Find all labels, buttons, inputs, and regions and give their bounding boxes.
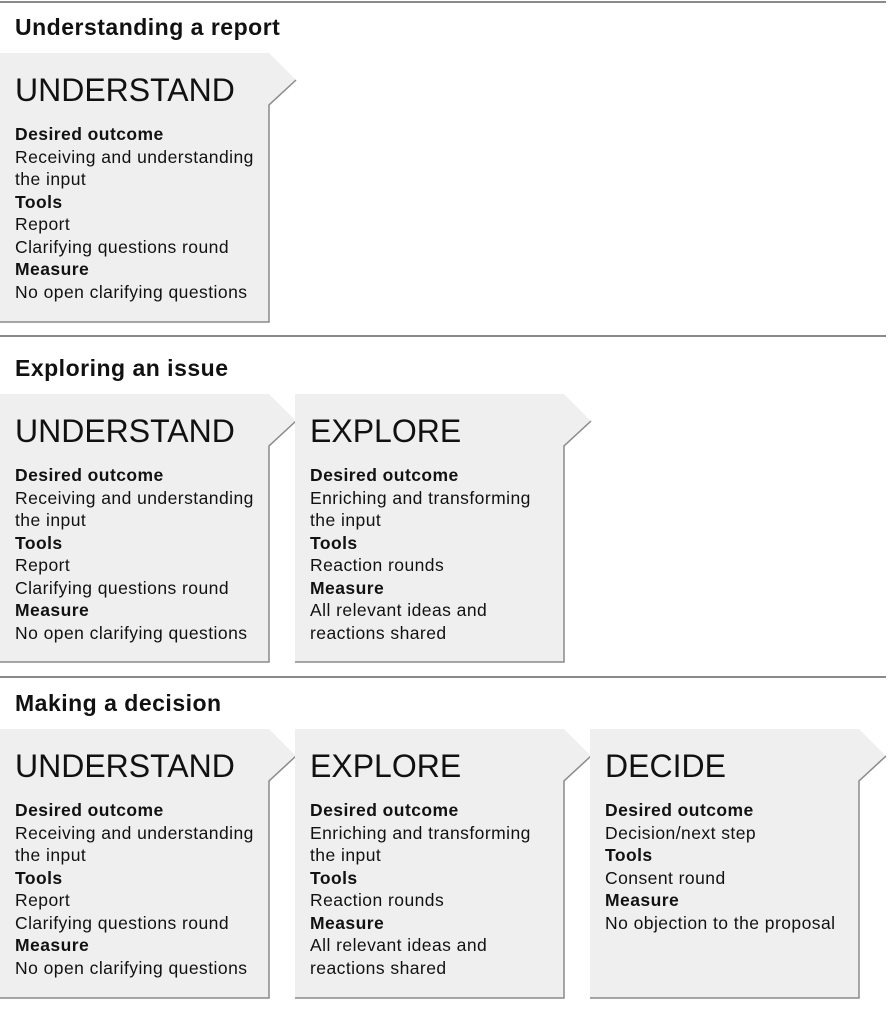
card: understand 3: Tools [15, 868, 63, 888]
card: understand 1: No open clarifying questions [15, 282, 247, 302]
card: explore 3: All relevant ideas and [310, 935, 487, 955]
card: explore 3: Desired outcome [310, 800, 459, 820]
card: explore 3 [295, 729, 590, 999]
card: understand 3: Clarifying questions round [15, 912, 229, 932]
title: understanding a report: Understanding a report [15, 14, 280, 40]
card: decide 3: No objection to the proposal [605, 912, 836, 932]
card: understand 3: the input [15, 845, 86, 865]
card: understand 2: Measure [15, 600, 89, 620]
card: understand 3: Desired outcome [15, 800, 164, 820]
card: understand 2: UNDERSTAND [15, 413, 235, 449]
card: understand 2: the input [15, 510, 86, 530]
card: understand 3: Report [15, 890, 70, 910]
card: explore 3: Tools [310, 868, 358, 888]
card: explore 2: EXPLORE [310, 413, 461, 449]
card: understand 2: No open clarifying questions [15, 622, 247, 642]
card: decide 3: DECIDE [605, 748, 726, 784]
card: understand 1: Desired outcome [15, 124, 164, 144]
card: understand 1 [0, 53, 296, 323]
card: understand 2: Receiving and understanding [15, 488, 254, 508]
card: explore 2: the input [310, 510, 381, 530]
card: decide 3: Consent round [605, 868, 726, 888]
card: understand 1: the input [15, 169, 86, 189]
title: exploring an issue: Exploring an issue [15, 355, 228, 381]
title: making a decision: Making a decision [15, 690, 222, 716]
card: explore 3: EXPLORE [310, 748, 461, 784]
card: explore 2 [295, 394, 592, 663]
card: understand 3: Receiving and understanding [15, 822, 254, 842]
card: understand 2: Desired outcome [15, 465, 164, 485]
card: explore 2: Tools [310, 532, 358, 552]
card: understand 1: Report [15, 214, 70, 234]
card: explore 2: Reaction rounds [310, 555, 444, 575]
card: understand 3: Measure [15, 935, 89, 955]
card: explore 2: Enriching and transforming [310, 488, 531, 508]
card: understand 1: Tools [15, 192, 63, 212]
card: explore 3: reactions shared [310, 958, 447, 978]
card: understand 2: Report [15, 555, 70, 575]
card: explore 3: Enriching and transforming [310, 822, 531, 842]
card: decide 3: Tools [605, 845, 653, 865]
card: decide 3: Decision/next step [605, 822, 756, 842]
card: understand 2: Tools [15, 532, 63, 552]
card: understand 1: UNDERSTAND [15, 72, 235, 108]
card: understand 3: No open clarifying questions [15, 958, 247, 978]
card: understand 2 [0, 394, 295, 663]
card: explore 2: Measure [310, 578, 384, 598]
card: explore 3: Measure [310, 912, 384, 932]
card: understand 3: UNDERSTAND [15, 748, 235, 784]
card: understand 3 [0, 729, 295, 999]
card: understand 2: Clarifying questions round [15, 578, 229, 598]
card: decide 3: Desired outcome [605, 800, 754, 820]
card: explore 3: the input [310, 845, 381, 865]
card: explore 2: Desired outcome [310, 465, 459, 485]
card: explore 2: All relevant ideas and [310, 600, 487, 620]
card: understand 1: Clarifying questions round [15, 236, 229, 256]
card: explore 3: Reaction rounds [310, 890, 444, 910]
card: understand 1: Measure [15, 259, 89, 279]
card: decide 3 [590, 729, 886, 999]
card: explore 2: reactions shared [310, 622, 447, 642]
card: decide 3: Measure [605, 890, 679, 910]
card: understand 1: Receiving and understanding [15, 146, 254, 166]
